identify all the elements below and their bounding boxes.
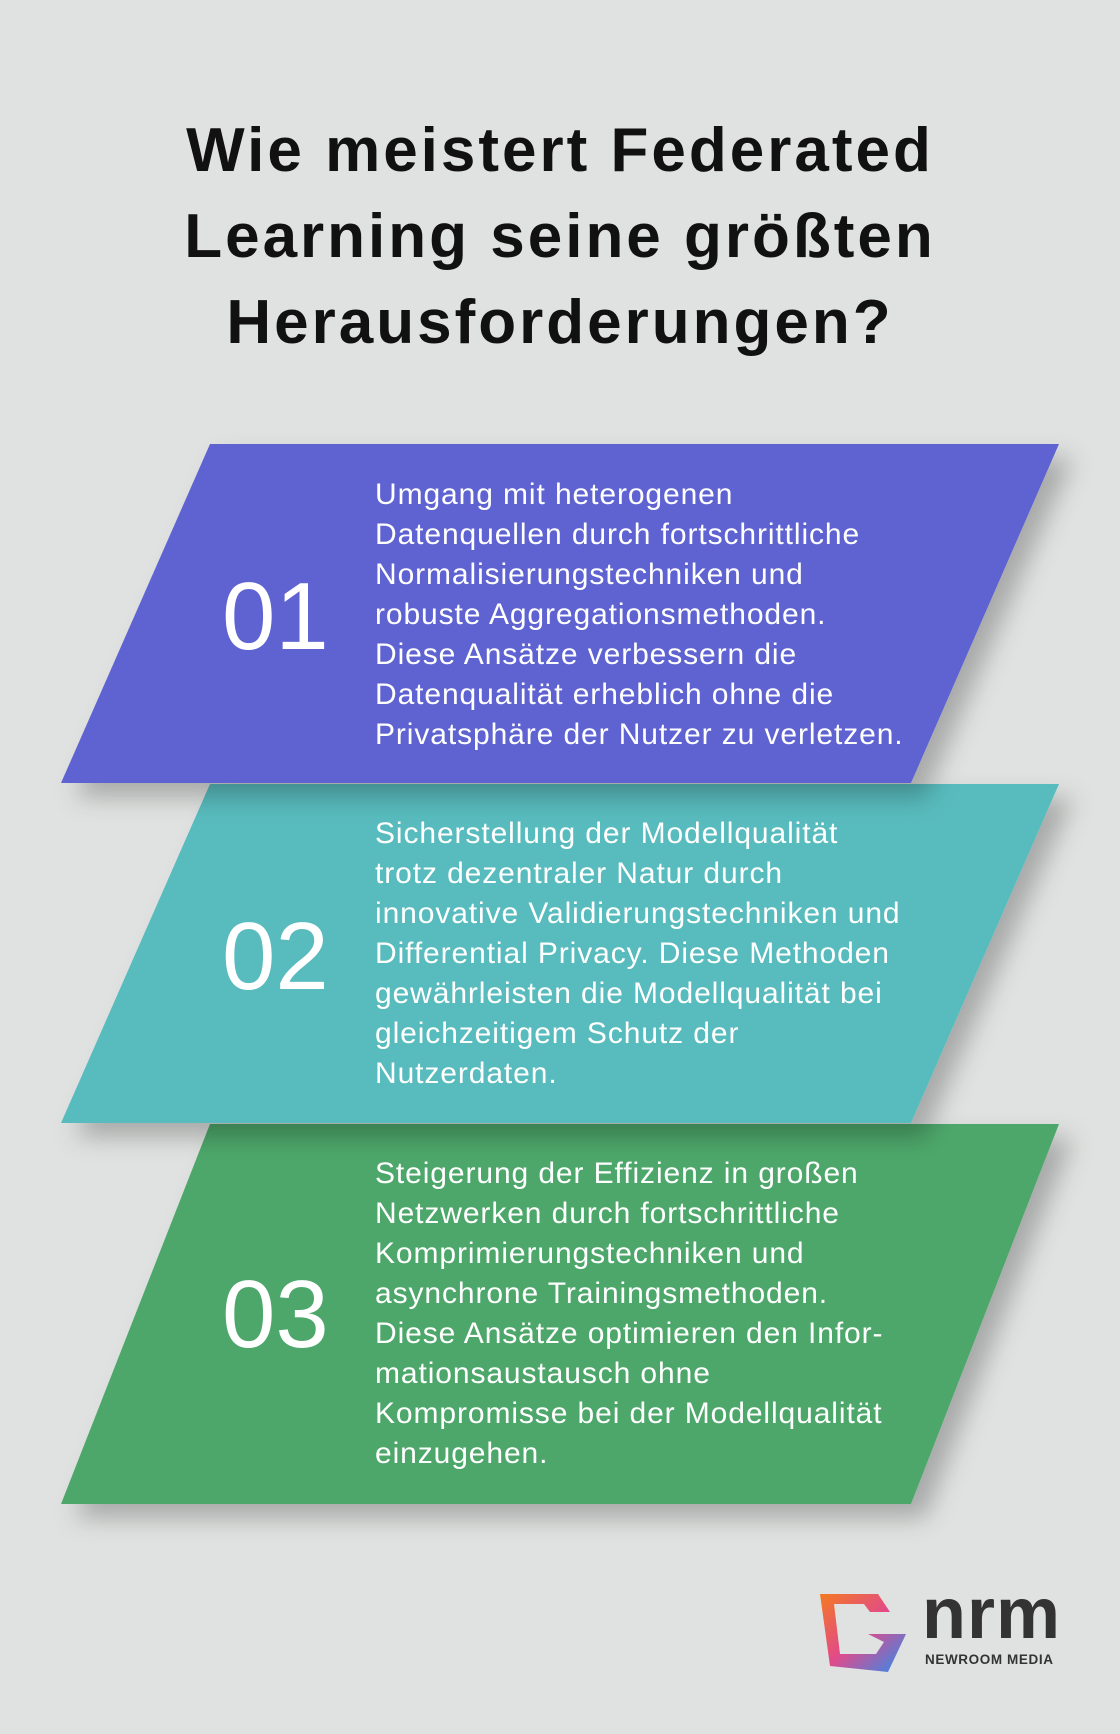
number 01: 01 — [222, 563, 329, 670]
text 2: Sicherstellung der Modellqualität — [375, 817, 838, 850]
panel 2 — [222, 817, 901, 1090]
text 1: Datenqualität erheblich ohne die — [375, 678, 834, 711]
logo: NEWROOM MEDIA — [925, 1652, 1054, 1667]
text 2: trotz dezentraler Natur durch — [375, 857, 783, 890]
text 3: Komprimierungstechniken und — [375, 1237, 805, 1270]
text 1: Datenquellen durch fortschrittliche — [375, 518, 860, 551]
text 1: robuste Aggregationsmethoden. — [375, 598, 826, 631]
logo — [820, 1574, 1061, 1672]
title: Learning seine größten — [184, 202, 936, 271]
text 2: Nutzerdaten. — [375, 1057, 558, 1090]
text 1: Umgang mit heterogenen — [375, 478, 733, 511]
text 2 — [375, 817, 901, 1090]
text 3: Steigerung der Effizienz in großen — [375, 1157, 859, 1190]
text 1 — [375, 478, 904, 751]
title: Wie meistert Federated — [186, 116, 934, 185]
text 3: einzugehen. — [375, 1437, 548, 1470]
text 3 — [375, 1157, 883, 1470]
title — [184, 116, 936, 357]
logo text: nrm — [922, 1574, 1061, 1654]
text 3: mationsaustausch ohne — [375, 1357, 711, 1390]
icon: logo mark — [820, 1594, 906, 1672]
number 02: 02 — [222, 903, 329, 1010]
text 2: gleichzeitigem Schutz der — [375, 1017, 739, 1050]
text 1: Diese Ansätze verbessern die — [375, 638, 797, 671]
text 1: Privatsphäre der Nutzer zu verletzen. — [375, 718, 904, 751]
text 2: gewährleisten die Modellqualität bei — [375, 977, 883, 1010]
panel 1 — [222, 478, 904, 751]
text 3: Kompromisse bei der Modellqualität — [375, 1397, 882, 1430]
text 2: innovative Validierungstechniken und — [375, 897, 901, 930]
text 1: Normalisierungstechniken und — [375, 558, 804, 591]
text 3: asynchrone Trainingsmethoden. — [375, 1277, 828, 1310]
text 3: Netzwerken durch fortschrittliche — [375, 1197, 840, 1230]
panel 3 — [222, 1157, 883, 1470]
text 2: Differential Privacy. Diese Methoden — [375, 937, 890, 970]
title: Herausforderungen? — [226, 288, 894, 357]
number 03: 03 — [222, 1261, 329, 1368]
text 3: Diese Ansätze optimieren den Infor- — [375, 1317, 883, 1350]
